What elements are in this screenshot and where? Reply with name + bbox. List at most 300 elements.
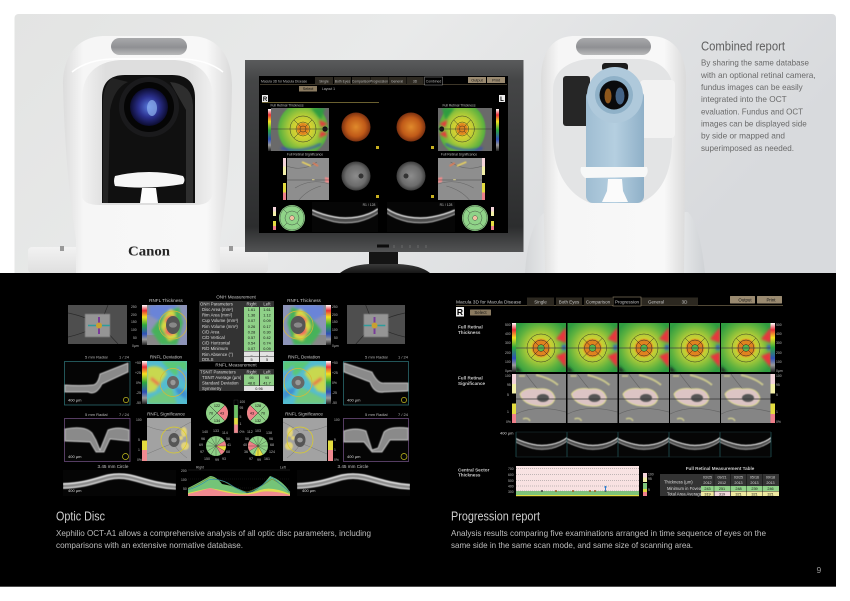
monitor screen header: Macula 3D for Macula Disease: [261, 80, 307, 84]
table: RNFL measurement: Right: [246, 370, 257, 374]
screen header with tabs and buttons: R: [457, 307, 463, 317]
chart: clock-hour pie right eye: 93: [222, 457, 226, 461]
table: ONH measurement: Rim Area (mm²): [202, 313, 233, 318]
legend: quadrant colour scale: 0%: [240, 430, 244, 434]
chart: clock-hour pie right eye: 140: [202, 430, 208, 434]
map: RNFL significance left eye: 0%: [334, 458, 339, 462]
OCT scan: 5 mm radial 7/24 left eye: [344, 412, 409, 462]
chart: quadrant pie right eye: [206, 402, 228, 424]
table: ONH measurement: 0.42: [263, 336, 271, 340]
legend: quadrant colour scale: 1: [240, 422, 242, 426]
chart: clock-hour pie right eye: [199, 429, 231, 462]
chart: central sector thickness trend: 500: [508, 479, 514, 483]
table: ONH measurement: 5: [266, 358, 268, 362]
table: RNFL measurement: 0.96: [255, 387, 263, 391]
OCT scan: 3.45 mm circle right eye: [63, 464, 176, 496]
OCT scan: 3.45 mm circle left eye: [297, 464, 410, 496]
monitor left thickness map: [268, 103, 329, 155]
map: RNFL deviation right eye: RNFL Deviation: [150, 354, 183, 360]
monitor right thickness map: [438, 103, 499, 155]
chart: clock-hour pie right eye: 69: [199, 443, 203, 447]
legend: trend colour scale: 100: [648, 472, 654, 476]
OCT scan: 3.45 mm circle right eye: 3.45 mm Circle: [98, 464, 129, 469]
table: full retinal measurement: 321: [735, 492, 742, 496]
map: RNFL thickness right eye: [131, 298, 187, 348]
OCT scan: 5 mm radial 7/24 left eye: 400 µm: [347, 454, 361, 459]
text: progression description: same side in the same scan mode, and same size of scanning area.: [451, 540, 693, 550]
device: monitor: [245, 60, 524, 252]
table: ONH measurement: [199, 294, 274, 362]
table: full retinal measurement: 2012: [703, 481, 712, 485]
label: Full Retinal Thickness: Thickness: [458, 330, 481, 335]
label: Central Sector Thickness: [458, 468, 490, 478]
chart: clock-hour pie right eye: 114: [222, 431, 228, 435]
OCT scan: 5 mm radial 7/24 right eye: [64, 412, 130, 462]
screen header with tabs and buttons: Select: [474, 310, 487, 315]
chart: quadrant pie right eye: 122: [214, 404, 220, 408]
legend: quadrant colour scale: 95: [240, 406, 243, 410]
text: optic disc description: Xephilio OCT-A1 allows a comprehensive analysis of all optic disc parameters, including: [56, 528, 371, 538]
monitor grayscale fundus images: [342, 162, 434, 198]
text: combined report description: integrated into the OCT: [701, 94, 787, 104]
table: ONH measurement: DDLS: [202, 357, 214, 362]
chart: clock-hour pie right eye: 99: [215, 458, 219, 462]
table: ONH measurement: –: [250, 353, 253, 357]
map: RNFL deviation left eye: -50: [332, 401, 337, 405]
screen header with tabs and buttons: Both Eyes: [559, 300, 580, 304]
OCT scan: 5 mm radial 1/24 right eye: 1 / 24: [119, 354, 130, 360]
table: ONH measurement: C/D Area: [202, 329, 220, 334]
map: RNFL significance left eye: 100: [334, 418, 340, 422]
chart: clock-hour pie left eye: 96: [269, 437, 273, 441]
map: RNFL thickness left eye: 50: [334, 336, 338, 340]
monitor OCT scans: R1 / 128: [363, 203, 376, 207]
table: RNFL measurement: 41.7: [263, 382, 271, 386]
table: ONH measurement: 5: [250, 358, 253, 362]
chart: quadrant pie right eye: 43: [220, 412, 224, 416]
thickness maps row: 300: [776, 341, 782, 345]
device: right OCT scanner with retinal camera: [525, 36, 705, 273]
map: RNFL thickness left eye: RNFL Thickness: [287, 298, 322, 303]
monitor screen header: Both Eyes: [335, 80, 351, 84]
map: RNFL deviation left eye: +25: [332, 371, 338, 375]
OCT scan: 5 mm radial 7/24 right eye: 5 mm Radial: [85, 412, 108, 417]
table: ONH measurement: ONH Measurement: [216, 294, 257, 300]
thickness maps row: 200: [776, 351, 782, 355]
OCT scan: 3.45 mm circle left eye: 400 µm: [302, 488, 316, 493]
table: full retinal measurement: 2013: [750, 481, 759, 485]
table: RNFL measurement: [199, 362, 274, 391]
map: RNFL significance left eye: 1: [334, 448, 336, 452]
heading: Combined report: Combined report: [701, 40, 785, 54]
panel: combined report: [14, 14, 836, 279]
monitor left thickness map: Full Retinal Thickness: [270, 104, 304, 108]
thickness maps row: [505, 323, 783, 373]
table: ONH measurement: 0.17: [263, 325, 271, 329]
monitor screen header: Progression: [370, 80, 388, 84]
text: combined report description: [700, 58, 816, 153]
monitor right thickness map: Full Retinal Thickness: [442, 104, 476, 108]
table: full retinal measurement: 246: [767, 487, 774, 491]
logo: Canon: Canon: [128, 244, 171, 258]
OCT scans row: [500, 430, 771, 457]
monitor screen header: Select: [303, 87, 314, 91]
chart: clock-hour pie right eye: 97: [200, 450, 204, 454]
map: RNFL deviation left eye: [283, 354, 338, 405]
chart: central sector thickness trend: 600: [508, 473, 514, 477]
table: RNFL measurement: 95: [265, 376, 269, 380]
OCT scan: 5 mm radial 1/24 right eye: 5 mm Radial: [85, 354, 108, 360]
map: RNFL deviation left eye: -25: [332, 391, 337, 395]
significance maps row: 5: [776, 393, 778, 397]
map: RNFL deviation left eye: +50: [332, 361, 338, 365]
chart: clock-hour pie left eye: 99: [257, 458, 261, 462]
text: optic disc description: comparisons with an extensive normative database.: [56, 540, 243, 550]
legend: trend colour scale: [643, 472, 654, 496]
table: ONH measurement: R/D Minimum: [202, 346, 228, 351]
OCT scan: 5 mm radial 1/24 right eye: [64, 354, 130, 405]
chart: clock-hour pie left eye: 97: [249, 457, 253, 461]
label: Full Retinal Thickness: [458, 324, 483, 335]
legend: quadrant colour scale: 5: [240, 415, 242, 419]
table: ONH measurement: 1.61: [248, 308, 255, 312]
table: full retinal measurement: Minimum in Fovea: [667, 486, 702, 491]
monitor screen header: Output: [471, 78, 484, 82]
chart: quadrant pie right eye: 70: [209, 412, 213, 416]
OCT scan: 5 mm radial 7/24 right eye: 400 µm: [68, 454, 82, 459]
map: RNFL significance left eye: [283, 412, 340, 462]
screen header with tabs and buttons: Progression: [615, 300, 640, 304]
label: Full Retinal Thickness: Full Retinal: [458, 324, 483, 330]
map: RNFL deviation right eye: 0%: [136, 381, 141, 385]
text: combined report description: By sharing the same database: [701, 58, 809, 68]
text: combined report description: fundus images can be easily: [701, 82, 803, 92]
table: full retinal measurement: 2012: [718, 481, 726, 485]
monitor screen header: Comparison: [352, 80, 370, 84]
chart: clock-hour pie left eye: 68: [270, 443, 274, 447]
table: full retinal measurement: 239: [751, 487, 758, 491]
heading: Optic Disc: Optic Disc: [56, 510, 105, 524]
significance maps row: 1: [776, 410, 778, 414]
right fundus image: [347, 305, 405, 344]
label: Full Retinal Significance: [458, 376, 486, 386]
table: full retinal measurement: [660, 466, 779, 496]
monitor screen header: Print: [492, 78, 501, 82]
table: RNFL measurement: Left: [263, 370, 271, 374]
screen header with tabs and buttons: General: [648, 300, 664, 304]
chart: TSNIT RNFL thickness profile: Left: [280, 466, 286, 470]
chart: TSNIT RNFL thickness profile: 200: [181, 469, 187, 473]
map: RNFL thickness right eye: 50: [133, 336, 137, 340]
table: RNFL measurement: RNFL Measurement: [215, 362, 257, 368]
table: ONH measurement: –: [266, 353, 269, 357]
map: RNFL deviation left eye: RNFL Deviation: [288, 354, 321, 360]
table: full retinal measurement: 319: [704, 492, 711, 496]
map: RNFL deviation right eye: -50: [136, 401, 141, 405]
table: ONH measurement: Rim Volume (mm³): [202, 324, 238, 329]
table: ONH measurement: 0.09: [263, 347, 271, 351]
chart: clock-hour pie left eye: 112: [247, 430, 253, 434]
chart: TSNIT RNFL thickness profile: 100: [181, 478, 187, 482]
map: RNFL thickness left eye: 250: [332, 305, 338, 309]
table: ONH measurement: 0.07: [248, 347, 255, 351]
significance maps row: 95: [776, 383, 780, 387]
screen header with tabs and buttons: 3D: [682, 300, 688, 304]
monitor screen header: 3D: [413, 80, 418, 84]
chart: central sector thickness trend: 700: [508, 467, 514, 471]
chart: quadrant pie left eye: [247, 402, 269, 424]
map: RNFL thickness left eye: [283, 298, 339, 348]
table: full retinal measurement: Total Area Average: [667, 491, 703, 496]
map: RNFL thickness left eye: 100: [332, 328, 338, 332]
table: ONH measurement: C/D Vertical: [202, 335, 225, 340]
chart: clock-hour pie left eye: [243, 429, 275, 462]
map: RNFL significance right eye: 1: [138, 448, 140, 452]
chart: clock-hour pie right eye: 133: [213, 429, 219, 433]
OCT scan: 3.45 mm circle right eye: 400 µm: [68, 488, 82, 493]
table: full retinal measurement: 03/25: [703, 476, 712, 480]
table: RNFL measurement: Standard Deviation: [202, 381, 239, 386]
map: RNFL thickness right eye: 150: [131, 320, 137, 324]
table: ONH measurement: 0.07: [248, 319, 255, 323]
table: full retinal measurement: Full Retinal Measurement Table: [686, 466, 755, 471]
map: RNFL significance right eye: 0%: [137, 458, 142, 462]
panel: black lower band: [0, 273, 836, 587]
thickness maps row: 400: [505, 332, 511, 336]
OCT scan: 3.45 mm circle left eye: 3.45 mm Circle: [338, 464, 369, 469]
significance maps row: [505, 374, 782, 424]
screen header with tabs and buttons: Macula 3D for Macula Disease: [456, 300, 522, 306]
chart: clock-hour pie left eye: 36: [244, 450, 248, 454]
text: combined report description: by side or mapped and: [701, 131, 785, 141]
table: RNFL measurement: TSNIT Parameters: [200, 370, 236, 374]
chart: clock-hour pie left eye: 138: [266, 431, 272, 435]
thickness maps row: 400: [776, 332, 782, 336]
table: ONH measurement: C/D Horizontal: [202, 341, 230, 346]
significance maps row: 100: [505, 374, 511, 378]
map: RNFL deviation right eye: +50: [135, 361, 141, 365]
legend: quadrant colour scale: 100: [240, 400, 245, 404]
device: monitor stand: [340, 252, 430, 273]
OCT scans row: 400 µm: [500, 430, 514, 436]
significance maps row: 0%: [506, 420, 511, 424]
chart: quadrant pie left eye: 132: [255, 419, 261, 423]
map: RNFL significance right eye: 100: [136, 418, 142, 422]
report: Optic Disc: [56, 294, 410, 550]
table: ONH measurement: 1.36: [248, 314, 255, 318]
report: Progression: [451, 296, 783, 550]
thickness maps row: 200: [505, 351, 511, 355]
OCT scan: 5 mm radial 1/24 right eye: 400 µm: [68, 398, 82, 402]
thickness maps row: 100: [505, 360, 511, 364]
table: RNFL measurement: TSNIT Average (µm): [202, 375, 242, 380]
monitor screen header: Combined: [426, 80, 441, 84]
monitor screen header: Single: [319, 80, 329, 84]
OCT scan: 5 mm radial 7/24 right eye: 7 / 24: [119, 412, 130, 417]
monitor colour fundus images: [342, 112, 434, 149]
table: RNFL measurement: 48.6: [248, 382, 255, 386]
monitor significance maps: Full Retinal Significance: [441, 152, 477, 156]
OCT scan: 5 mm radial 1/24 left eye: 5 mm Radial: [365, 354, 388, 360]
significance maps row: 100: [776, 374, 782, 378]
table: RNFL measurement: Symmetry: [202, 386, 222, 391]
map: RNFL significance left eye: RNFL Significance: [285, 412, 323, 416]
map: RNFL deviation right eye: -25: [136, 391, 141, 395]
OCT scan: 5 mm radial 7/24 left eye: 5 mm Radial: [365, 412, 388, 417]
legend: quadrant colour scale: [234, 400, 245, 434]
chart: clock-hour pie left eye: 161: [264, 457, 270, 461]
table: full retinal measurement: 03/25: [734, 476, 743, 480]
thickness maps row: 100: [776, 360, 782, 364]
text: combined report description: images can be displayed side: [701, 118, 807, 128]
table: full retinal measurement: Thickness (µm): [664, 480, 693, 484]
text: combined report description: superimposed as needed.: [701, 143, 794, 153]
table: ONH measurement: Right: [246, 302, 257, 306]
significance maps row: 1: [507, 410, 509, 414]
map: RNFL deviation left eye: 0%: [332, 381, 337, 385]
chart: clock-hour pie left eye: 103: [255, 429, 261, 433]
chart: central sector thickness trend: [508, 466, 639, 496]
table: ONH measurement: 0.57: [248, 336, 255, 340]
chart: clock-hour pie right eye: 68: [226, 450, 230, 454]
chart: clock-hour pie right eye: 96: [201, 437, 205, 441]
table: ONH measurement: 0.26: [248, 325, 255, 329]
monitor screen header: [260, 77, 507, 103]
thickness maps row: 300: [505, 341, 511, 345]
table: ONH measurement: 0.74: [263, 342, 271, 346]
significance maps row: 95: [507, 383, 511, 387]
screen header with tabs and buttons: Print: [766, 298, 776, 302]
OCT scan: 5 mm radial 1/24 left eye: 400 µm: [347, 398, 361, 402]
thickness maps row: 0µm: [505, 369, 512, 373]
map: RNFL significance right eye: [136, 412, 191, 462]
table: full retinal measurement: 09/21: [717, 476, 727, 480]
chart: clock-hour pie left eye: 124: [269, 450, 275, 454]
monitor screen header: General: [391, 80, 403, 84]
table: ONH measurement: Disc Area (mm²): [202, 307, 234, 312]
table: ONH measurement: 0.28: [248, 330, 255, 334]
table: full retinal measurement: 248: [735, 487, 742, 491]
chart: TSNIT RNFL thickness profile: 50: [183, 487, 187, 491]
map: RNFL thickness right eye: 250: [131, 305, 137, 309]
table: ONH measurement: 1.12: [263, 314, 271, 318]
chart: quadrant pie left eye: 128: [255, 404, 261, 408]
label: Central Sector Thickness: Thickness: [458, 472, 481, 478]
table: RNFL measurement: 95: [249, 376, 254, 380]
table: ONH measurement: Rim Absence (°): [202, 352, 234, 357]
monitor macular sector charts: [273, 205, 494, 231]
table: ONH measurement: Left: [263, 302, 271, 306]
table: full retinal measurement: 319: [719, 492, 725, 496]
chart: clock-hour pie right eye: 150: [204, 457, 210, 461]
thickness maps row: 500: [505, 323, 511, 327]
monitor significance maps: [283, 152, 485, 200]
monitor significance maps: Full Retinal Significance: [287, 152, 323, 156]
significance maps row: 5: [507, 393, 509, 397]
chart: central sector thickness trend: 300: [508, 490, 514, 494]
table: full retinal measurement: 251: [719, 487, 725, 491]
map: RNFL significance left eye: 5: [334, 438, 336, 442]
monitor screen header: R: [263, 97, 268, 103]
screen header with tabs and buttons: Output: [738, 298, 752, 302]
table: ONH measurement: 0.09: [263, 319, 271, 323]
map: RNFL deviation right eye: [135, 354, 187, 405]
table: ONH measurement: 1.61: [263, 308, 271, 312]
table: full retinal measurement: 321: [751, 492, 758, 496]
monitor screen header: L: [500, 97, 504, 103]
chart: quadrant pie left eye: 70: [261, 412, 265, 416]
chart: quadrant pie right eye: 134: [214, 419, 220, 423]
monitor OCT scans: R1 / 128: [440, 203, 453, 207]
table: full retinal measurement: 243: [704, 487, 711, 491]
monitor OCT scans: [312, 202, 455, 232]
device: left OCT scanner: [28, 36, 268, 273]
map: RNFL thickness right eye: 0µm: [132, 344, 139, 348]
legend: trend colour scale: 95: [648, 477, 652, 481]
table: ONH measurement: 0.30: [263, 330, 271, 334]
table: full retinal measurement: 09/18: [766, 476, 775, 480]
map: RNFL thickness left eye: 200: [332, 313, 338, 317]
map: RNFL thickness left eye: 150: [332, 320, 338, 324]
thickness maps row: 0µm: [776, 369, 783, 373]
table: ONH measurement: ONH Parameters: [200, 302, 233, 306]
chart: TSNIT RNFL thickness profile: [181, 466, 290, 496]
text: combined report description: evaluation. Fundus and OCT: [701, 106, 803, 116]
map: RNFL thickness left eye: 0µm: [332, 344, 339, 348]
chart: clock-hour pie right eye: 41: [227, 443, 231, 447]
map: RNFL thickness right eye: 200: [131, 313, 137, 317]
screen header with tabs and buttons: Single: [534, 300, 547, 304]
text: progression description: [451, 528, 766, 550]
significance maps row: 0%: [776, 420, 781, 424]
OCT scan: 5 mm radial 1/24 left eye: 1 / 24: [398, 354, 409, 360]
label: Full Retinal Significance: Significance: [458, 381, 486, 386]
text: optic disc description: [56, 528, 371, 550]
map: RNFL deviation right eye: +25: [135, 371, 141, 375]
text: combined report description: with an optional retinal camera,: [700, 70, 816, 80]
chart: clock-hour pie left eye: 56: [245, 437, 249, 441]
map: RNFL significance right eye: 5: [138, 438, 140, 442]
table: full retinal measurement: 05/16: [750, 476, 759, 480]
page number: 9: [816, 565, 822, 575]
OCT scan: 5 mm radial 1/24 left eye: [344, 354, 409, 405]
label: Full Retinal Significance: Full Retinal: [458, 376, 483, 380]
table: ONH measurement: Cup Volume (mm³): [202, 318, 239, 323]
label: Central Sector Thickness: Central Sector: [458, 468, 490, 472]
table: full retinal measurement: 2013: [766, 481, 775, 485]
table: full retinal measurement: 2013: [734, 481, 743, 485]
table: ONH measurement: 0.54: [248, 342, 255, 346]
map: RNFL thickness right eye: 100: [131, 328, 137, 332]
map: RNFL significance right eye: RNFL Significance: [147, 412, 185, 416]
map: RNFL thickness right eye: RNFL Thickness: [149, 298, 184, 303]
chart: clock-hour pie right eye: 56: [226, 437, 230, 441]
legend: trend colour scale: 5: [648, 488, 650, 492]
text: progression description: Analysis results comparing five examinations arranged in time sequence of eyes on the: [451, 528, 766, 538]
chart: quadrant pie left eye: 43: [250, 412, 254, 416]
OCT scan: 5 mm radial 7/24 left eye: 7 / 24: [398, 412, 409, 417]
screen header with tabs and buttons: Comparison: [586, 300, 611, 304]
chart: clock-hour pie left eye: 40: [243, 443, 247, 447]
chart: TSNIT RNFL thickness profile: Right: [196, 466, 204, 470]
monitor screen header: Layout 1: [322, 87, 335, 91]
left fundus image: [68, 305, 127, 344]
heading: Progression report: Progression report: [451, 510, 540, 524]
screen header with tabs and buttons: [456, 296, 783, 317]
table: full retinal measurement: 321: [767, 492, 774, 496]
thickness maps row: 500: [776, 323, 782, 327]
chart: central sector thickness trend: 400: [508, 484, 514, 488]
